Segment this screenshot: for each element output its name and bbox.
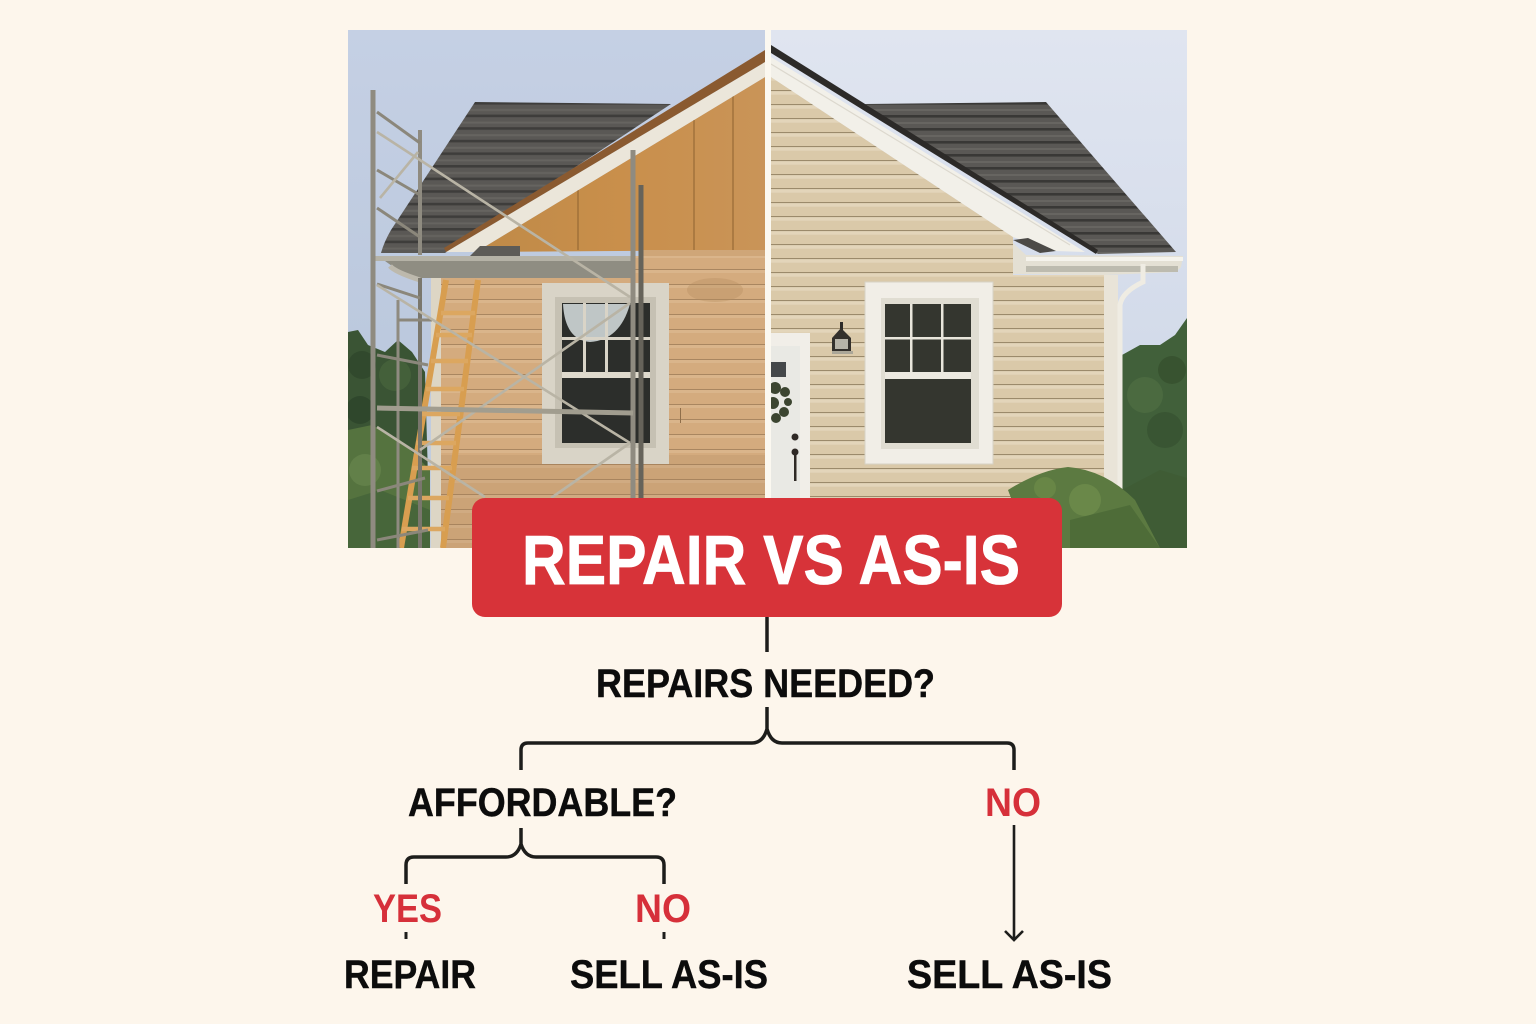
rake trim left (446, 62, 765, 252)
label: no left: NO (635, 887, 691, 931)
branch: affordable (406, 828, 664, 884)
photo: finished house (767, 30, 1187, 548)
question: repairs needed: REPAIRS NEEDED? (596, 662, 935, 706)
connector: title to question (765, 617, 769, 652)
damaged siding (440, 256, 765, 548)
gutter right (1013, 243, 1183, 275)
outcome: repair: REPAIR (344, 953, 476, 997)
label: no right: NO (985, 781, 1041, 825)
sky right (771, 30, 1187, 354)
trees left (346, 330, 430, 548)
plywood gable (476, 77, 765, 252)
fascia and gutter (385, 261, 630, 278)
arrow: no to sell as-is (1005, 825, 1023, 940)
trees right (1122, 318, 1187, 490)
right roof (865, 102, 1176, 254)
left roof (381, 102, 671, 253)
new siding (771, 77, 1104, 498)
right window (865, 282, 993, 464)
rake trim right (771, 57, 1085, 252)
photo: house under repair (346, 30, 765, 548)
wreath (771, 382, 792, 423)
corner trim right (1104, 275, 1118, 490)
dash: no to sell as-is (662, 932, 666, 939)
flowchart (344, 617, 1112, 997)
scaffolding (373, 90, 641, 548)
left window (542, 283, 669, 464)
question: affordable: AFFORDABLE? (408, 781, 677, 825)
branch: repairs needed (521, 707, 1014, 770)
title banner (472, 498, 1062, 617)
dash: yes to repair (404, 932, 408, 939)
bushes (1008, 467, 1160, 548)
door (771, 333, 810, 498)
wall lamp (832, 322, 853, 354)
corner trim left (431, 278, 441, 548)
label: yes: YES (373, 887, 442, 931)
outcome: sell as-is left: SELL AS-IS (570, 953, 768, 997)
downspout (1120, 264, 1143, 490)
ladder (401, 280, 478, 548)
title: REPAIR VS AS-IS (522, 521, 1020, 599)
outcome: sell as-is right: SELL AS-IS (907, 953, 1112, 997)
sky left (348, 30, 765, 548)
divider between halves (765, 30, 771, 500)
